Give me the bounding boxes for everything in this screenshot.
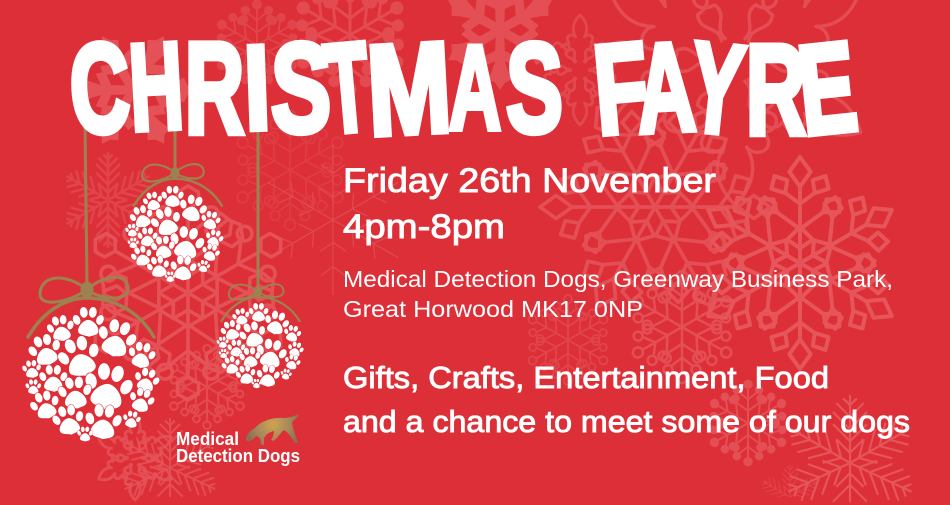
venue address: Medical Detection Dogs, Greenway Business Park, [343,266,893,292]
logo wordmark: Medical [176,429,239,449]
title: M [364,16,455,163]
venue address: Great Horwood MK17 0NP [343,296,643,322]
bauble: large paw ornament [21,277,163,442]
title: S [271,18,331,160]
title: T [319,15,375,160]
title: F [589,16,654,162]
title: I [242,20,272,155]
event date and time: 4pm-8pm [343,208,505,246]
event date and time: Friday 26th November [343,162,716,200]
title: E [792,15,863,162]
venue address [343,266,893,322]
event highlights: and a chance to meet some of our dogs [343,404,910,439]
title: A [449,20,501,154]
title: R [185,17,244,162]
title: S [506,17,563,159]
logo wordmark: Detection Dogs [176,446,300,466]
title: R [746,18,806,161]
title: Y [683,17,750,162]
title: H [126,16,187,157]
event highlights [343,360,910,439]
icon: sniffing dog [246,414,299,445]
hanging strings [85,125,258,292]
bauble: small paw ornament [216,284,306,388]
logo: Medical Detection Dogs [176,414,300,466]
bauble: top paw ornament [124,164,226,282]
title: C [66,15,133,161]
event date and time [343,162,716,246]
event highlights: Gifts, Crafts, Entertainment, Food [343,360,829,395]
logo wordmark [176,429,300,466]
title: A [633,16,698,160]
title [66,15,863,163]
